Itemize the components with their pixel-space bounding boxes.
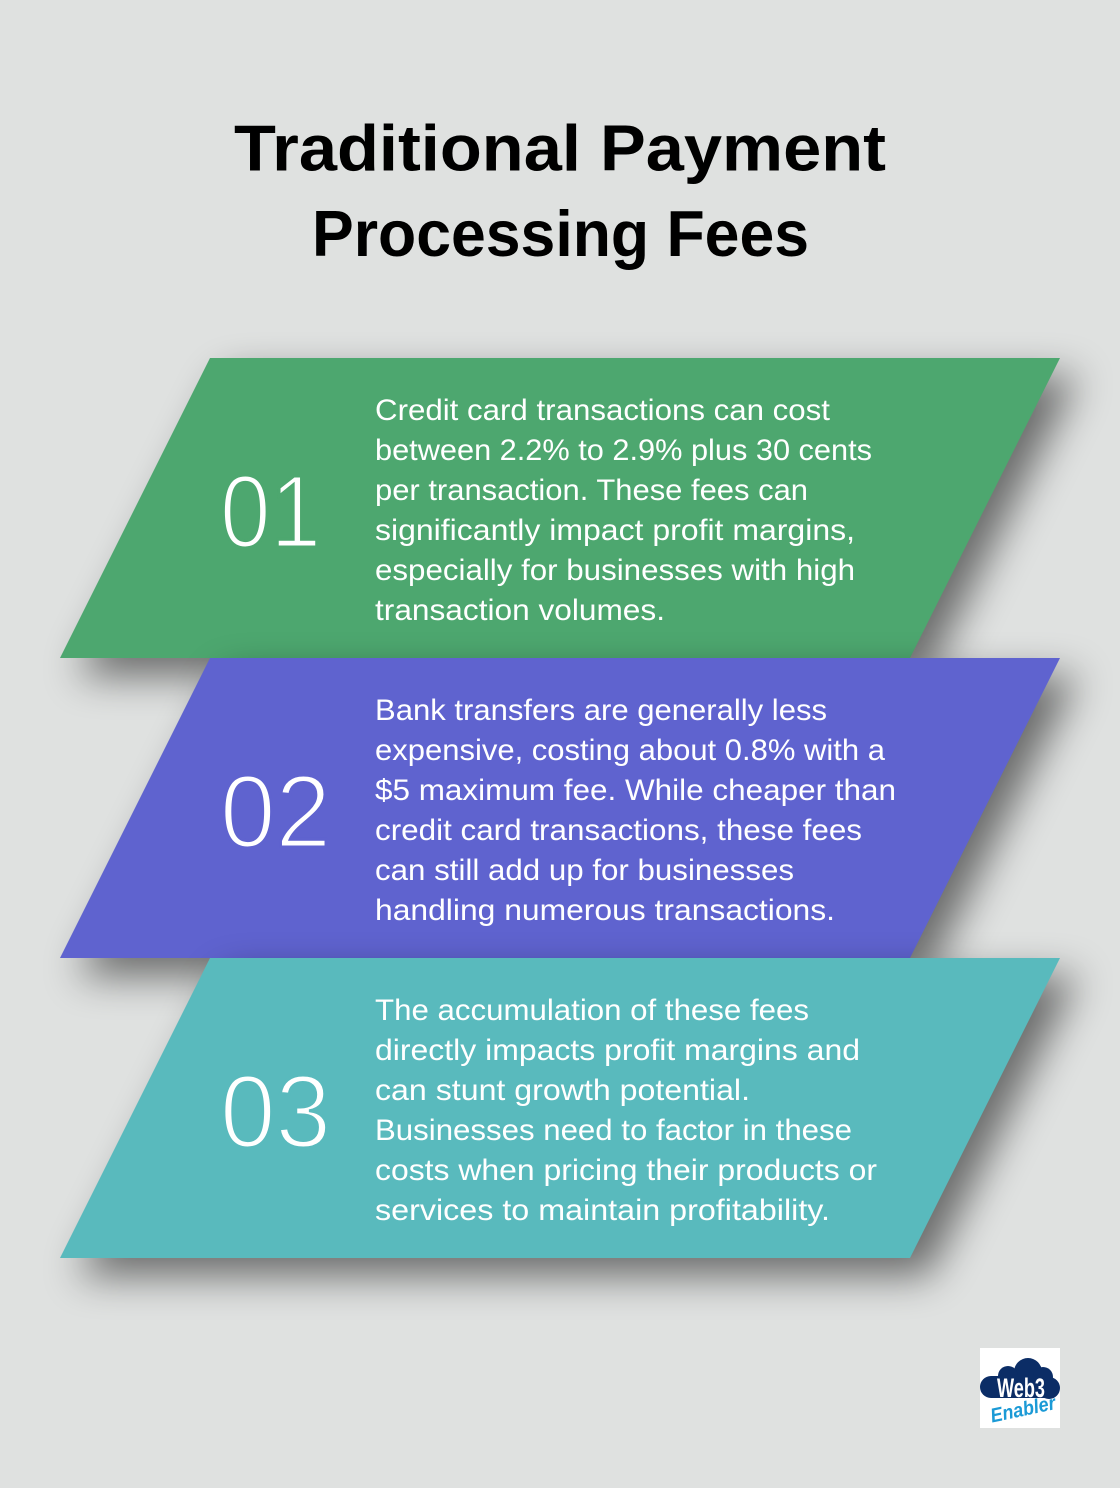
logo: Web3 Enabler: Enabler — [988, 1392, 1059, 1428]
logo: Web3 Enabler: Web3 — [997, 1373, 1045, 1403]
panel: step 01 credit cards: 01 — [220, 454, 321, 569]
panel: step 01 credit cards: transaction volumes. — [375, 594, 665, 627]
panel: step 02 bank transfers: credit card transactions, these fees — [375, 814, 862, 847]
title: Processing Fees — [312, 197, 809, 270]
panel: step 03 accumulation: services to maintain profitability. — [375, 1194, 830, 1227]
panel: step 02 bank transfers — [60, 658, 1078, 976]
panel: step 03 accumulation: 03 — [220, 1054, 331, 1169]
title: Traditional Payment — [234, 112, 886, 184]
panel: step 02 bank transfers: expensive, costing about 0.8% with a — [375, 734, 885, 767]
panel: step 03 accumulation: costs when pricing their products or — [375, 1154, 877, 1187]
panel: step 01 credit cards: especially for businesses with high — [375, 554, 855, 587]
panel: step 01 credit cards — [60, 358, 1078, 676]
panel: step 03 accumulation: can stunt growth potential. — [375, 1074, 750, 1107]
panel: step 02 bank transfers: can still add up for businesses — [375, 854, 794, 887]
panel: step 01 credit cards: Credit card transactions can cost — [375, 394, 831, 427]
panel: step 02 bank transfers: handling numerous transactions. — [375, 894, 835, 927]
panel: step 01 credit cards: between 2.2% to 2.9% plus 30 cents — [375, 434, 872, 467]
panel: step 03 accumulation: The accumulation of these fees — [375, 994, 809, 1027]
panel: step 02 bank transfers: Bank transfers are generally less — [375, 694, 827, 727]
title — [234, 112, 886, 270]
panel: step 02 bank transfers: $5 maximum fee. While cheaper than — [375, 774, 896, 807]
panel: step 01 credit cards: per transaction. These fees can — [375, 474, 808, 507]
panel: step 03 accumulation: directly impacts profit margins and — [375, 1034, 860, 1067]
panel: step 02 bank transfers: 02 — [220, 754, 331, 869]
panel: step 03 accumulation — [60, 958, 1078, 1276]
panel: step 01 credit cards: significantly impact profit margins, — [375, 514, 855, 547]
panel: step 03 accumulation: Businesses need to factor in these — [375, 1114, 852, 1147]
logo: Web3 Enabler — [980, 1348, 1060, 1428]
